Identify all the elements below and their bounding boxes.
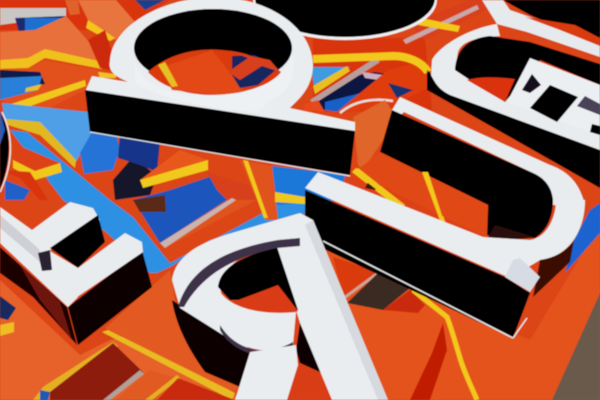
black notch inside	[50, 215, 105, 268]
hole black	[218, 247, 298, 310]
dark brush stripe	[178, 238, 300, 307]
foam shapes: bottom right floor	[300, 203, 600, 400]
red gap between stems	[287, 323, 332, 400]
lower black face	[305, 190, 530, 338]
black side wall	[427, 70, 600, 188]
foam shapes: blue panels left	[0, 103, 305, 273]
interior black	[455, 36, 600, 102]
black hole wall	[134, 9, 292, 87]
top white band	[388, 97, 585, 205]
foam shapes: right floor	[340, 155, 500, 262]
letter: top centre dark inner wall	[253, 0, 437, 40]
lower white band	[305, 172, 585, 278]
letter: right with square notch	[427, 24, 600, 188]
inner wall	[218, 288, 296, 350]
letter: lower left E shape	[0, 202, 152, 345]
white main	[172, 213, 388, 400]
foam shapes: bottom left floor	[0, 270, 240, 400]
black lower wall	[172, 300, 250, 387]
square notch white walls	[507, 58, 600, 135]
black side wall	[0, 247, 77, 345]
outer white band	[431, 24, 600, 150]
letter: bottom centre A shape	[172, 213, 388, 400]
white outer ring	[85, 0, 355, 132]
upper black wall	[380, 110, 553, 238]
hole floor	[230, 285, 298, 316]
letter: large lower D shape	[305, 97, 585, 338]
foam shapes: top left	[0, 0, 170, 112]
letter: top ring with bar	[85, 0, 355, 176]
right curved dark wall	[533, 240, 574, 297]
red floor patch	[467, 77, 515, 102]
white ring lower wall	[135, 52, 293, 112]
hole red floor	[148, 50, 281, 95]
white top	[0, 202, 100, 307]
black wedge between stems	[296, 323, 322, 373]
letter: top right fragment	[482, 0, 600, 57]
letter: left edge curve	[0, 110, 10, 192]
tab	[505, 258, 540, 292]
foam shapes: top centre	[303, 0, 495, 170]
floor between walls	[355, 152, 488, 237]
black front face	[68, 250, 152, 345]
black bar face	[85, 90, 355, 175]
prong	[48, 233, 143, 297]
foam shapes: centre strip under bar	[80, 132, 350, 248]
lower stem	[235, 345, 298, 400]
